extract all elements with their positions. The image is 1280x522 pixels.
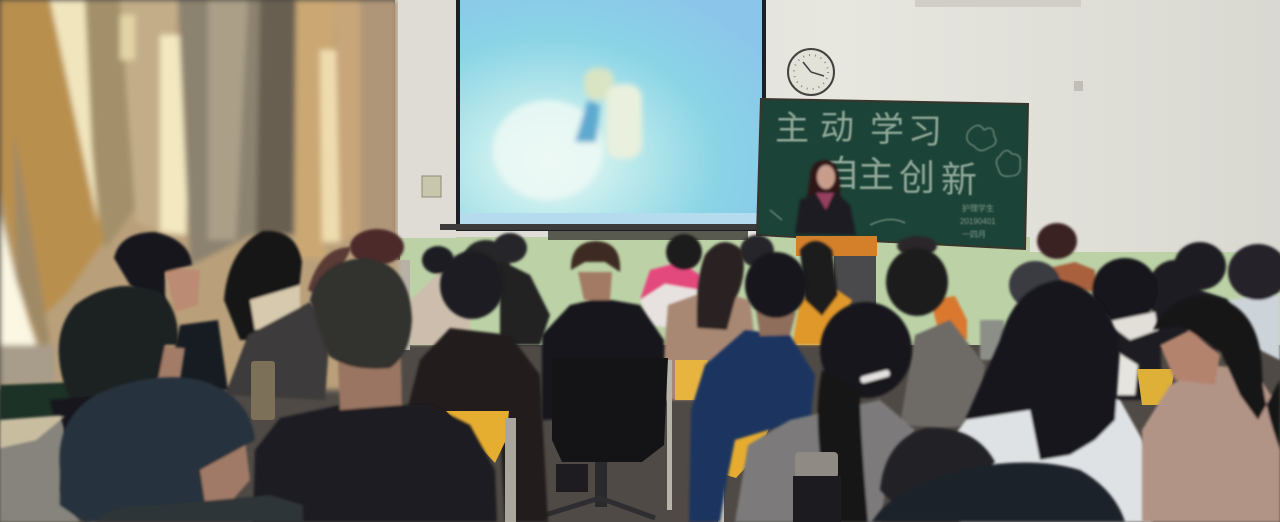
student in grey sweater <box>886 248 985 428</box>
student with short hair <box>50 286 240 440</box>
chalkboard: 自 <box>824 153 860 194</box>
projection screen <box>456 0 766 231</box>
projector ledge <box>440 224 760 230</box>
wall light switch <box>1074 81 1083 91</box>
backpack and cloth, lower left <box>0 415 80 522</box>
window sill area <box>180 260 410 350</box>
student in yellow <box>792 241 852 345</box>
chalkboard <box>757 99 1028 249</box>
chalkboard: 主 <box>775 110 809 148</box>
lectern <box>796 236 877 306</box>
student in black t-shirt, centre left <box>253 258 497 522</box>
student in black sweater, centre <box>542 241 664 420</box>
screen centre glow <box>493 68 642 200</box>
black office chair <box>545 358 668 518</box>
thermos, left <box>251 361 275 420</box>
ceiling unit <box>915 0 1081 7</box>
left students <box>0 231 352 425</box>
student in foreground, lower left <box>59 377 303 522</box>
chalkboard: 主 <box>858 154 894 195</box>
chalkboard: 新 <box>941 159 977 200</box>
chalk flowers <box>770 125 1020 225</box>
chalkboard: 学 <box>870 111 904 149</box>
clock <box>788 49 834 95</box>
yellow chair tops and frames <box>667 360 1175 522</box>
chalkboard: 护理学生 <box>962 203 994 213</box>
student in navy jacket <box>689 252 815 522</box>
wall column <box>398 0 456 238</box>
yellow chair in front of hoodie <box>446 411 516 522</box>
curtains <box>0 0 398 390</box>
floor shadow behind students <box>0 345 1280 522</box>
student with ponytail <box>735 302 915 522</box>
chalkboard: 一四月 <box>962 230 986 239</box>
student in hoodie, left of centre <box>402 251 548 522</box>
green wainscot <box>400 237 1280 350</box>
student in pink sweater <box>1142 296 1280 522</box>
wall socket <box>422 176 441 197</box>
student in white jacket <box>957 280 1152 522</box>
thermos bottle <box>793 452 841 522</box>
back row students <box>350 223 1280 400</box>
foreground student, lower centre <box>872 428 1125 522</box>
chalkboard: 动 <box>820 109 854 147</box>
teacher <box>795 160 856 235</box>
student in plaid shirt <box>660 242 762 400</box>
wall <box>395 0 1280 255</box>
chalkboard: 20190401 <box>960 217 996 226</box>
chalkboard: 创 <box>899 157 935 198</box>
chalkboard: 习 <box>908 113 942 151</box>
